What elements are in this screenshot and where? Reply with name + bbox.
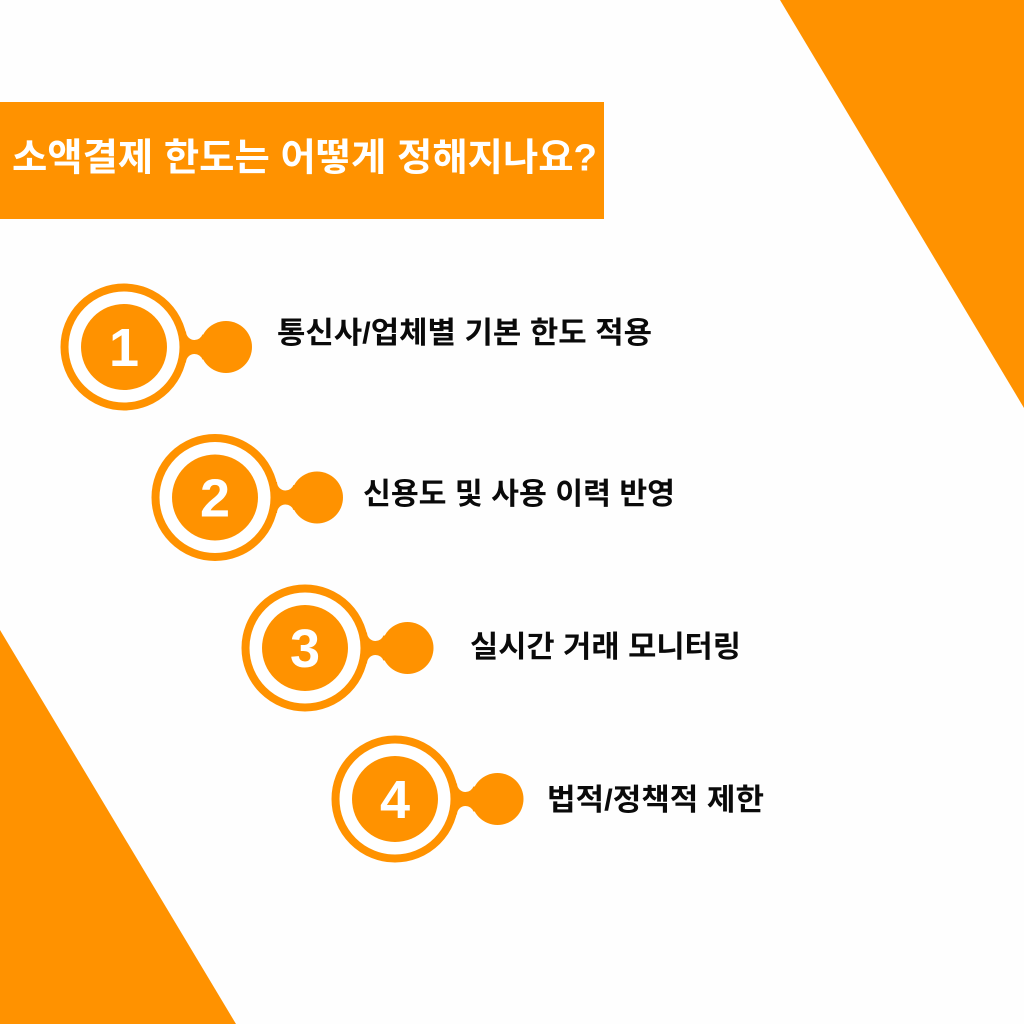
title banner bbox=[0, 102, 604, 219]
step 4 badge bbox=[336, 740, 524, 858]
step 1 bbox=[64, 288, 652, 406]
top right triangle bbox=[780, 0, 1024, 408]
step 2 bbox=[156, 438, 675, 557]
step 4 badge: 4 bbox=[380, 770, 410, 830]
step 4 bbox=[336, 740, 764, 858]
step 3 label: 실시간 거래 모니터링 bbox=[470, 631, 741, 664]
step 3 badge: 3 bbox=[290, 619, 320, 679]
step 3 badge bbox=[246, 588, 434, 708]
title text: 소액결제 한도는 어떻게 정해지나요? bbox=[12, 138, 597, 180]
step 2 badge: 2 bbox=[200, 468, 230, 528]
step 1 badge bbox=[64, 288, 252, 406]
bottom left triangle bbox=[0, 630, 236, 1024]
step 1 badge: 1 bbox=[109, 318, 139, 378]
step 1 label: 통신사/업체별 기본 한도 적용 bbox=[277, 317, 652, 350]
step 2 label: 신용도 및 사용 이력 반영 bbox=[363, 478, 675, 511]
step 4 label: 법적/정책적 제한 bbox=[547, 784, 764, 817]
step 2 badge bbox=[156, 438, 343, 557]
step 3 bbox=[246, 588, 741, 708]
